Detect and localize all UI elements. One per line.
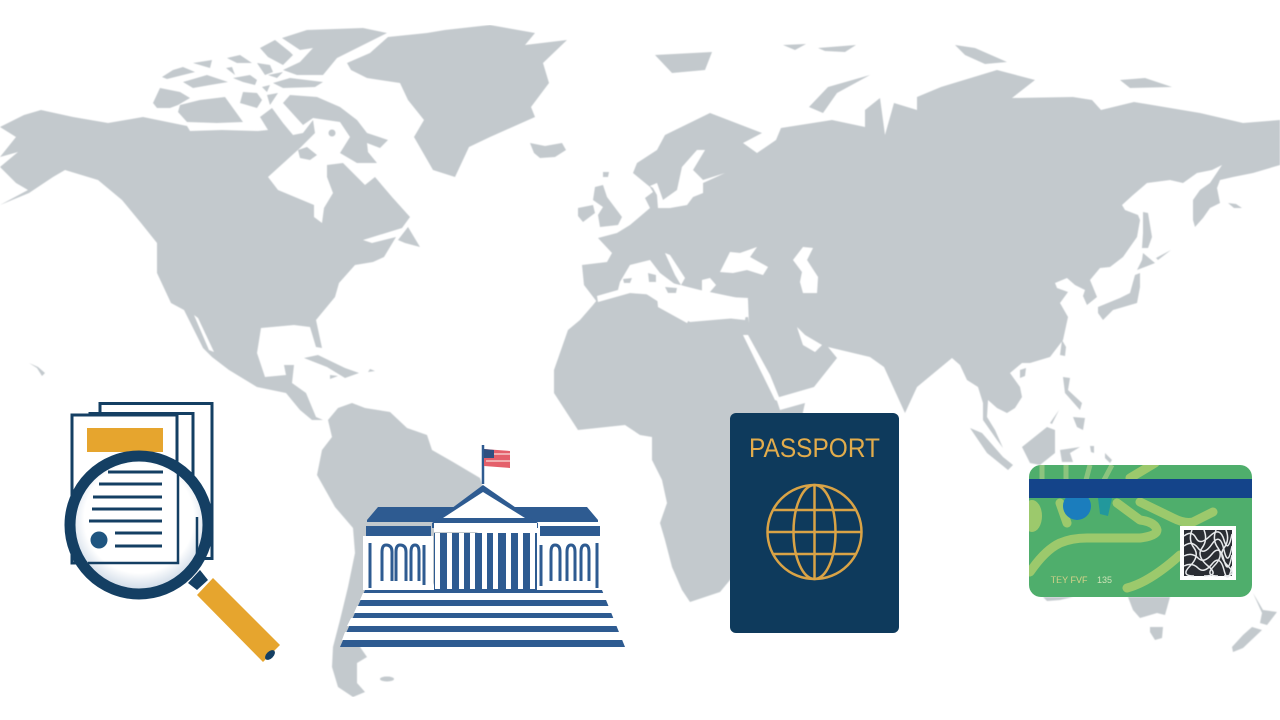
icon: government building	[340, 445, 625, 647]
Adriatic Sea	[665, 253, 685, 285]
card left blob	[1029, 500, 1042, 532]
South America	[317, 403, 492, 697]
photo dot	[90, 532, 108, 548]
wing bodies	[363, 536, 433, 590]
card body	[1029, 465, 1252, 597]
Africa	[554, 290, 805, 602]
Baffin Island	[283, 95, 388, 163]
Arctic islands	[153, 28, 387, 160]
back page	[100, 404, 212, 558]
Black Sea	[720, 247, 768, 275]
card small text: ᎢᎬY FVF	[1050, 575, 1088, 585]
Mediterranean	[597, 260, 748, 323]
Caribbean and small islands	[29, 227, 420, 379]
QR code	[1180, 526, 1236, 580]
card blue emblem	[1063, 492, 1091, 520]
Baja California gulf	[194, 315, 214, 352]
flag	[483, 445, 510, 484]
Falkland Islands	[380, 676, 394, 682]
card wavy pattern	[1022, 463, 1213, 588]
middle page	[90, 414, 193, 564]
document text lines	[89, 472, 163, 546]
wing roofs	[367, 507, 598, 522]
orange label	[87, 428, 163, 452]
icon: documents under magnifying glass	[70, 404, 280, 662]
page inside lens	[88, 473, 197, 563]
wing bands	[366, 526, 600, 536]
Southeast Asia islands	[970, 377, 1112, 470]
magnifying glass lens	[70, 456, 208, 594]
Mediterranean islands	[623, 273, 677, 293]
icon: green card: 135	[1097, 575, 1112, 585]
card stripe	[1029, 479, 1252, 498]
Greenland	[347, 25, 567, 177]
wing windows	[370, 543, 597, 588]
passport cover	[730, 413, 899, 633]
steps	[340, 590, 625, 647]
Red Sea	[743, 335, 781, 402]
Baltic Sea	[650, 150, 725, 208]
Iceland	[530, 143, 566, 158]
icon: green card	[1022, 463, 1252, 597]
front page	[72, 415, 177, 563]
Persian Gulf	[797, 327, 822, 352]
seas cut out of the map	[194, 150, 822, 402]
pediment	[432, 485, 538, 528]
card top mottling	[1042, 465, 1112, 480]
passport title: PASSPORT	[749, 433, 880, 463]
North America	[0, 108, 410, 420]
magnifying glass handle	[188, 570, 280, 662]
icon: passport	[730, 413, 899, 633]
central colonnade	[434, 533, 537, 591]
Eurasia	[582, 70, 1280, 448]
Caspian Sea	[793, 247, 818, 293]
East Asia islands	[1020, 203, 1242, 378]
globe emblem	[768, 485, 862, 579]
entablature	[434, 523, 537, 532]
UK, Ireland, Svalbard and northern islands	[578, 44, 1172, 227]
Australia, Tasmania and New Zealand	[1043, 593, 1277, 652]
